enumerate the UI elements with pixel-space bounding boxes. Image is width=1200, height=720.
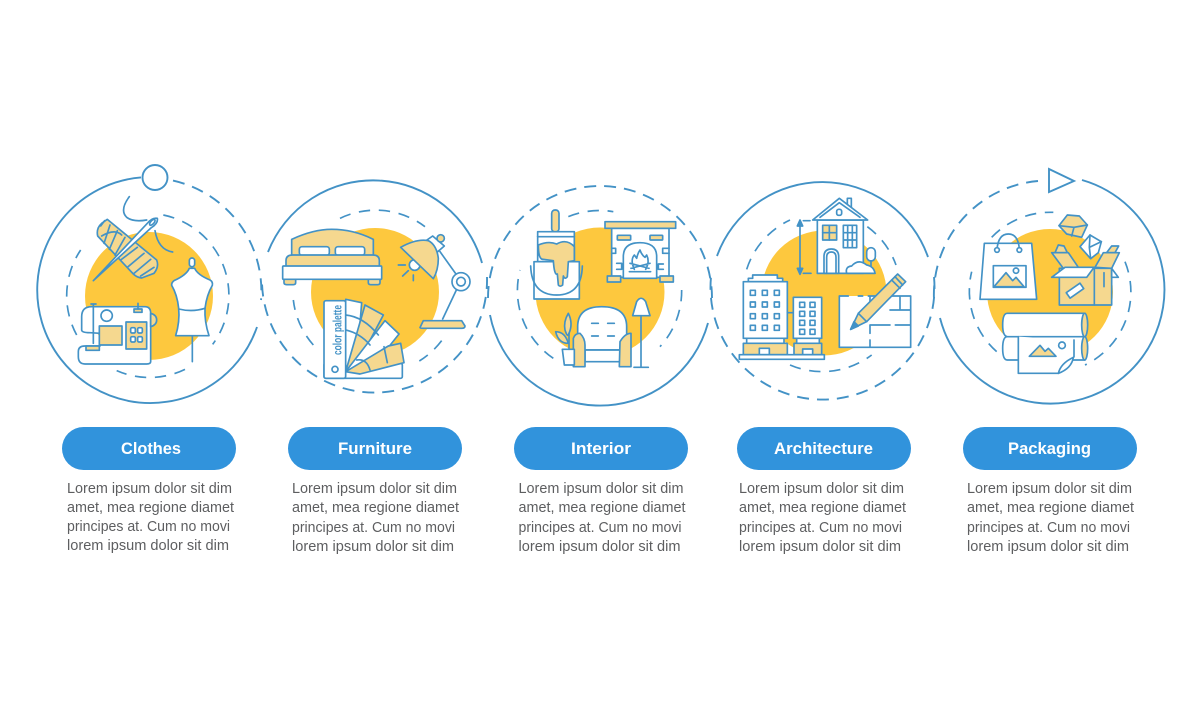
- text block: Interior: lorem ipsum dolor sit dim: [518, 538, 680, 555]
- text block: Clothes: amet, mea regione diamet: [67, 499, 235, 516]
- panel: architecture: [710, 182, 934, 400]
- yellow circle: interior: [536, 228, 664, 356]
- pill: Clothes: Clothes: [121, 440, 181, 458]
- text block: Clothes: principes at. Cum no movi: [67, 518, 230, 535]
- icon: dress form: [172, 258, 212, 362]
- icon: floor plan and pencil: [839, 274, 911, 347]
- text block: Clothes: Lorem ipsum dolor sit dim: [67, 480, 232, 497]
- text block: Architecture: [739, 480, 907, 555]
- icon: thread spool and needle: [93, 197, 173, 281]
- icon: bed: [283, 229, 382, 285]
- text block: Interior: [518, 480, 686, 555]
- text block: Furniture: amet, mea regione diamet: [292, 499, 460, 516]
- yellow circle: architecture: [762, 230, 886, 356]
- text block: Interior: Lorem ipsum dolor sit dim: [518, 480, 684, 497]
- panel: interior: [488, 186, 712, 406]
- pill: Furniture: [288, 427, 462, 470]
- progress ring: furniture: [262, 180, 487, 393]
- text block: Interior: amet, mea regione diamet: [518, 499, 686, 516]
- pill: Furniture: Furniture: [338, 440, 412, 458]
- text block: Clothes: [67, 480, 235, 554]
- text block: Clothes: lorem ipsum dolor sit dim: [67, 537, 229, 554]
- progress ring: interior: [488, 186, 712, 406]
- text block: Furniture: Lorem ipsum dolor sit dim: [292, 480, 457, 497]
- icon: open box with cubes: [1052, 215, 1119, 305]
- pill: Architecture: [737, 427, 911, 470]
- icon group: packaging: [969, 212, 1131, 373]
- panel: clothes: [37, 165, 261, 403]
- text block: Interior: principes at. Cum no movi: [518, 519, 682, 536]
- icon: sewing machine: [78, 303, 157, 364]
- icon: fireplace: [605, 222, 676, 282]
- palette label: color palette: [332, 305, 344, 355]
- icon group: interior: [517, 210, 682, 367]
- pill: Interior: Interior: [571, 440, 632, 458]
- text block: Packaging: Lorem ipsum dolor sit dim: [967, 480, 1132, 497]
- icon group: furniture: [283, 210, 470, 378]
- text block: Packaging: principes at. Cum no movi: [967, 519, 1130, 536]
- icon: paint brush and bucket: [531, 210, 582, 299]
- pill: Clothes: [62, 427, 236, 470]
- icon: color palette fan: [324, 299, 404, 378]
- icon group: architecture: [739, 198, 911, 372]
- icon: paper rolls with printed sheet: [1003, 313, 1088, 373]
- yellow circle: furniture: [311, 228, 439, 356]
- pill: Packaging: Packaging: [1008, 440, 1091, 458]
- text block: Furniture: principes at. Cum no movi: [292, 519, 455, 536]
- text block: Packaging: lorem ipsum dolor sit dim: [967, 538, 1129, 555]
- yellow circle: packaging: [987, 229, 1113, 355]
- icon group: clothes: [67, 197, 229, 377]
- progress ring: clothes: [37, 165, 261, 403]
- text block: Architecture: amet, mea regione diamet: [739, 499, 907, 516]
- icon: apartment buildings: [739, 275, 824, 359]
- text block: Architecture: lorem ipsum dolor sit dim: [739, 538, 901, 555]
- icon: desk lamp: [398, 235, 470, 328]
- icon: shopping bag: [980, 234, 1037, 299]
- progress ring: architecture: [710, 182, 934, 400]
- pill: Architecture: Architecture: [774, 440, 873, 458]
- progress ring: packaging: [934, 169, 1164, 404]
- pill: Interior: [514, 427, 688, 470]
- yellow circle: clothes: [85, 232, 213, 360]
- text block: Packaging: amet, mea regione diamet: [967, 499, 1135, 516]
- text block: Packaging: [967, 480, 1135, 555]
- panel: furniture: [262, 180, 487, 393]
- text block: Architecture: principes at. Cum no movi: [739, 519, 902, 536]
- panel: packaging: [934, 169, 1164, 404]
- icon: armchair, plant and floor lamp: [556, 298, 650, 367]
- pill: Packaging: [963, 427, 1137, 470]
- text block: Architecture: Lorem ipsum dolor sit dim: [739, 480, 904, 497]
- text block: Furniture: [292, 480, 460, 555]
- text block: Furniture: lorem ipsum dolor sit dim: [292, 538, 454, 555]
- icon: house with height arrow: [797, 198, 875, 274]
